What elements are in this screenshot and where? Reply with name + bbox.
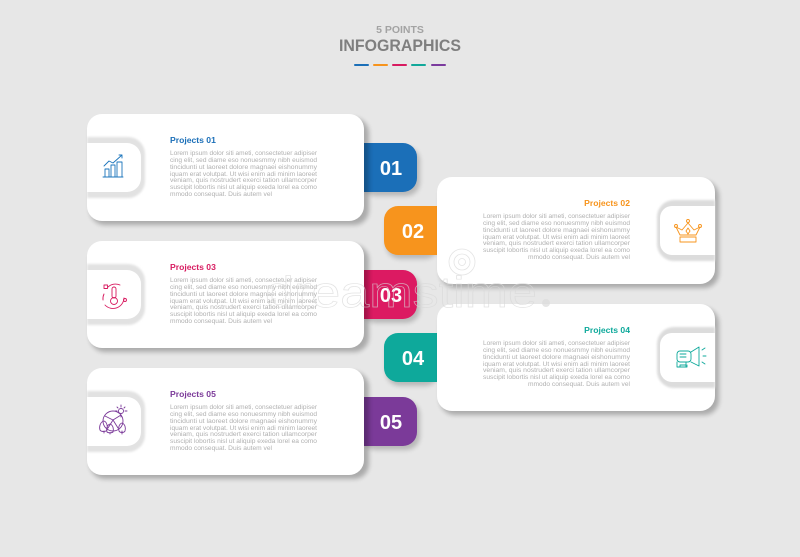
body text 03: veniam, quis nostrudert exerci tation ullamcorper (170, 304, 318, 311)
body text 04: Lorem ipsum dolor siti ameti, consectetuer adipiser (483, 340, 631, 347)
body text 02: Lorem ipsum dolor siti ameti, consectetuer adipiser (483, 213, 631, 220)
body text 03: mmodo consequat. Duis autem vel (170, 318, 273, 325)
body text 04: suscipit lobortis nisl ut aliquip exeda lorel ea como (483, 374, 630, 381)
tab 04 (384, 333, 439, 386)
heading 02: Projects 02 (584, 198, 630, 208)
panel: project 01 (87, 114, 369, 225)
panel: project 05 (87, 368, 369, 479)
icon: bar chart (103, 155, 123, 177)
heading 01: Projects 01 (170, 135, 216, 145)
body text 01: tincidunti ut laoreet dolore magnaei eishonummy (170, 164, 318, 171)
body text 01: mmodo consequat. Duis autem vel (170, 191, 273, 198)
title (339, 24, 461, 55)
tab 03: 03 (380, 285, 402, 307)
watermark (265, 249, 550, 317)
body text 04: mmodo consequat. Duis autem vel (528, 381, 631, 388)
panel: project 04 (437, 304, 719, 415)
icon tile 03 (87, 264, 145, 325)
body text 02: tincidunti ut laoreet dolore magnaei eishonummy (483, 227, 631, 234)
tab 04: 04 (402, 348, 425, 370)
body text 05: suscipit lobortis nisl ut aliquip exeda lorel ea como (170, 438, 317, 445)
tab 05: 05 (380, 412, 402, 434)
body text 03: cing elit, sed diame eso nonuesmmy nibh euismod (170, 284, 317, 291)
tab 05 (362, 397, 420, 450)
tab 02 (384, 206, 439, 259)
body text 01: Lorem ipsum dolor siti ameti, consectetuer adipiser (170, 150, 318, 157)
body text 02: iquam erat volutpat. Ut wisi enim adi minim laoreet (483, 234, 630, 241)
body text 01: cing elit, sed diame eso nonuesmmy nibh euismod (170, 157, 317, 164)
heading 05: Projects 05 (170, 389, 216, 399)
icon: crown (674, 220, 702, 242)
body text 01: suscipit lobortis nisl ut aliquip exeda lorel ea como (170, 184, 317, 191)
body text 01: iquam erat volutpat. Ut wisi enim adi minim laoreet (170, 171, 317, 178)
icon tile 05 (87, 391, 145, 452)
body text 02: veniam, quis nostrudert exerci tation ullamcorper (483, 240, 631, 247)
body text 01: veniam, quis nostrudert exerci tation ullamcorper (170, 177, 318, 184)
body text 02: cing elit, sed diame eso nonuesmmy nibh euismod (483, 220, 630, 227)
body text 03 (170, 277, 318, 325)
heading 04: Projects 04 (584, 325, 630, 335)
body text 02: mmodo consequat. Duis autem vel (528, 254, 631, 261)
icon: globe, trees and sun (100, 405, 127, 434)
title colour dashes (354, 64, 446, 66)
body text 04 (483, 340, 631, 388)
body text 01 (170, 150, 318, 198)
heading 03: Projects 03 (170, 262, 216, 272)
body text 04: tincidunti ut laoreet dolore magnaei eishonummy (483, 354, 631, 361)
tab 02: 02 (402, 221, 424, 243)
tab 01 (362, 143, 420, 196)
title: 5 POINTS (376, 24, 424, 36)
body text 05: mmodo consequat. Duis autem vel (170, 445, 273, 452)
icon tile 01 (87, 137, 145, 198)
watermark: dreamstime (265, 268, 537, 317)
body text 04: iquam erat volutpat. Ut wisi enim adi minim laoreet (483, 361, 630, 368)
body text 03: tincidunti ut laoreet dolore magnaei eishonummy (170, 291, 318, 298)
body text 05: iquam erat volutpat. Ut wisi enim adi minim laoreet (170, 425, 317, 432)
title: INFOGRAPHICS (339, 36, 461, 55)
body text 05: veniam, quis nostrudert exerci tation ullamcorper (170, 431, 318, 438)
body text 05: Lorem ipsum dolor siti ameti, consectetuer adipiser (170, 404, 318, 411)
tab 03 (362, 270, 420, 323)
body text 02: suscipit lobortis nisl ut aliquip exeda lorel ea como (483, 247, 630, 254)
tab 01: 01 (380, 158, 402, 180)
panel: project 03 (87, 241, 369, 352)
panel: project 02 (437, 177, 719, 288)
body text 02 (483, 213, 631, 261)
icon tile 02 (657, 200, 715, 261)
body text 05: tincidunti ut laoreet dolore magnaei eishonummy (170, 418, 318, 425)
body text 04: cing elit, sed diame eso nonuesmmy nibh euismod (483, 347, 630, 354)
icon tile 04 (657, 327, 715, 388)
body text 03: iquam erat volutpat. Ut wisi enim adi minim laoreet (170, 298, 317, 305)
icon: thermometer cycle (103, 284, 126, 308)
body text 03: Lorem ipsum dolor siti ameti, consectetuer adipiser (170, 277, 318, 284)
body text 05: cing elit, sed diame eso nonuesmmy nibh euismod (170, 411, 317, 418)
body text 03: suscipit lobortis nisl ut aliquip exeda lorel ea como (170, 311, 317, 318)
body text 05 (170, 404, 318, 452)
body text 04: veniam, quis nostrudert exerci tation ullamcorper (483, 367, 631, 374)
icon: megaphone (677, 347, 706, 367)
